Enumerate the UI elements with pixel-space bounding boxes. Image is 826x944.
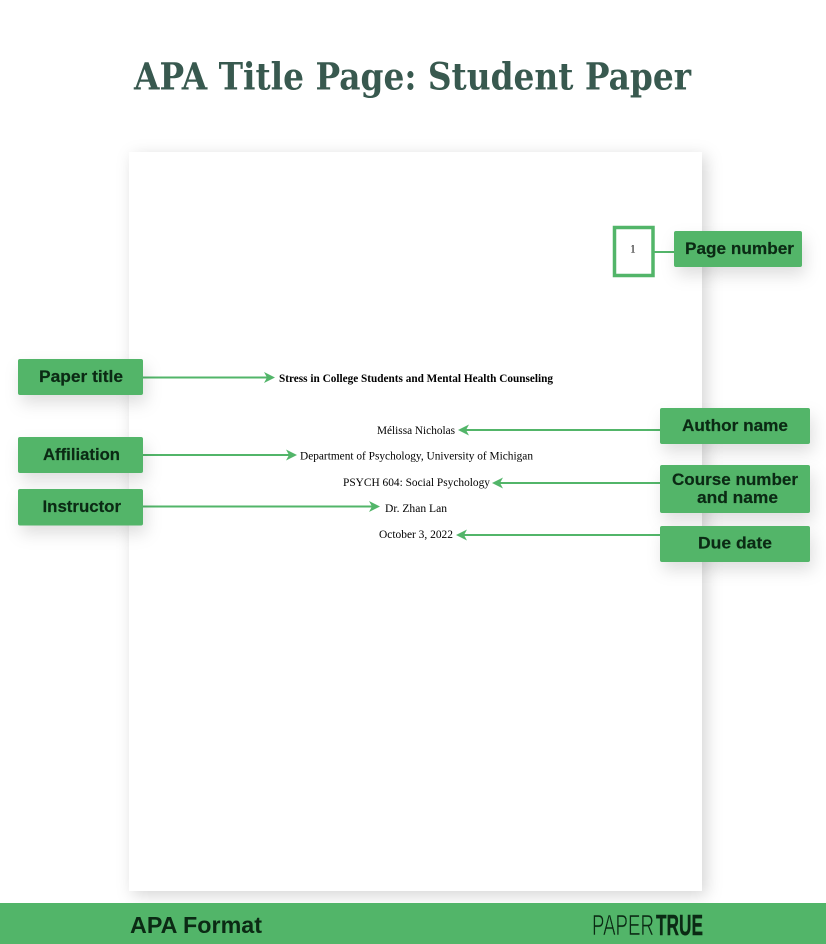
page number box: 1: [630, 244, 636, 256]
label: course number and name: [660, 465, 810, 513]
arrow: affiliation: [143, 450, 297, 460]
arrow: due date: [456, 530, 660, 540]
title: APA Title Page: Student Paper: [133, 54, 692, 98]
label: page number: [674, 231, 802, 267]
label: paper title: Paper title: [39, 367, 123, 386]
label: instructor: [18, 489, 143, 526]
label: course number and name: and name: [697, 488, 778, 507]
text: affiliation: Department of Psychology, University of Michigan: [300, 450, 533, 462]
logo: Paper True: TRUE: [656, 910, 703, 942]
label: author name: Author name: [682, 416, 788, 435]
label: affiliation: [18, 437, 143, 473]
footer heading: APA Format: [130, 912, 262, 938]
logo: Paper True: PAPER: [592, 910, 654, 942]
arrow: paper title: [143, 372, 275, 383]
label: author name: [660, 408, 810, 444]
label: due date: Due date: [698, 534, 772, 552]
footer bar: [0, 903, 826, 944]
arrow: author name: [458, 424, 660, 436]
text: author name: Mélissa Nicholas: [377, 425, 456, 437]
arrow: instructor: [143, 501, 380, 512]
page number box: [614, 228, 674, 276]
panel: paper sheet: [129, 152, 702, 891]
label: paper title: [18, 359, 143, 395]
text: due date: October 3, 2022: [379, 529, 453, 541]
text: paper title: Stress in College Students and Mental Health Counseling: [279, 373, 553, 385]
label: due date: [660, 526, 810, 562]
panel: paper text lines: [279, 373, 553, 541]
label: course number and name: Course number: [672, 470, 798, 489]
label: affiliation: Affiliation: [43, 445, 120, 464]
label: page number: Page number: [685, 239, 794, 258]
label: instructor: Instructor: [42, 497, 121, 516]
text: instructor: Dr. Zhan Lan: [385, 503, 447, 515]
arrow: course number and name: [492, 478, 660, 488]
text: course: PSYCH 604: Social Psychology: [343, 477, 490, 489]
